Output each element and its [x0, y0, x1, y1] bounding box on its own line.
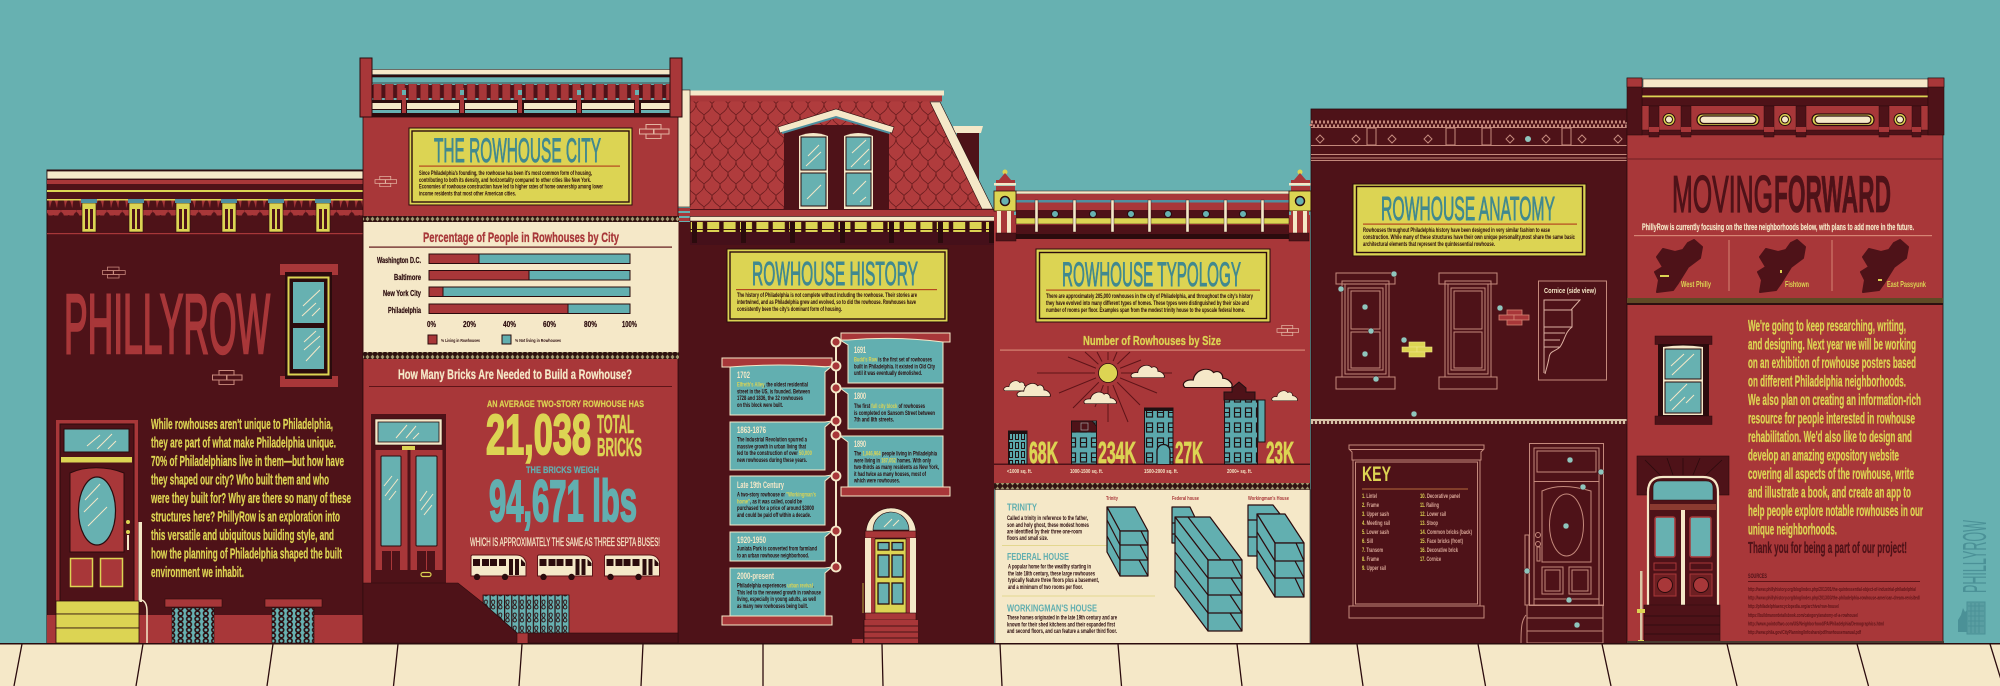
- eaves: [690, 210, 998, 245]
- bricks stats: BRICKS: [597, 432, 642, 462]
- size chart: houses and values: <1000 sq. ft.: [1007, 469, 1032, 475]
- panel 1691: [840, 338, 943, 383]
- building body: [690, 209, 994, 644]
- plate text: The history of Philadelphia is not complete without including the rowhouse. Their stories are: [737, 292, 917, 299]
- diagram: federal house: Federal house: [1172, 496, 1199, 502]
- icon: bus: [538, 555, 592, 580]
- basement window grate: [165, 599, 222, 643]
- map: west philly: [1655, 240, 1711, 292]
- trinity text: TRINITY: [1007, 502, 1037, 514]
- bar labels: Baltimore: [394, 273, 421, 282]
- panel late 19th century: purchased for a price of around $3000: [737, 505, 814, 512]
- panel 2000-present: as many new rowhouses being built.: [737, 603, 808, 610]
- timeline nodes: [832, 338, 840, 572]
- panel 1920-1950: Juniata Park is converted from farmland: [737, 546, 817, 552]
- panel 1800: [840, 388, 943, 429]
- panel 2000-present: living, especially in young adults, as well: [737, 596, 816, 603]
- panel 1863-1876: [730, 421, 832, 470]
- key: 2. Frame: [1362, 502, 1379, 509]
- window diagram 1: [1336, 273, 1395, 389]
- cornice: [360, 58, 682, 117]
- map: east passyunk: East Passyunk: [1887, 279, 1926, 289]
- bar labels: 60%: [543, 320, 556, 329]
- bar labels: Washington D.C.: [377, 256, 421, 265]
- panel 1890: were living in 187,052 homes. With only: [853, 458, 931, 464]
- title plate: ROWHOUSE ANATOMY: [1381, 191, 1555, 228]
- federal house text: FEDERAL HOUSE: [1007, 551, 1069, 563]
- title plate: [1353, 184, 1586, 256]
- title plate: [409, 128, 632, 205]
- diagram: federal house: [1172, 496, 1242, 631]
- panel 1800: The first full city block of rowhouses: [854, 403, 925, 410]
- diagram: trinity: [1106, 496, 1148, 576]
- workingman's house text: WORKINGMAN'S HOUSE: [1007, 602, 1097, 614]
- panel 1691: 1691: [854, 345, 866, 355]
- icon: bricks: [1277, 325, 1299, 336]
- title: MOVING: [1672, 166, 1773, 224]
- panel 2000-present: [730, 567, 832, 616]
- panel late 19th century: [730, 475, 832, 525]
- bar labels: 0%: [427, 320, 436, 329]
- panel 1920-1950: to an urban rowhouse neighborhood.: [737, 552, 809, 560]
- panel 1702: Elfreth's Alley, the oldest residential: [737, 382, 808, 388]
- trinity text: floors and small size.: [1007, 535, 1048, 542]
- cornice: [994, 170, 1311, 241]
- window: [280, 264, 338, 387]
- size chart: houses and values: 2000+ sq. ft.: [1227, 469, 1252, 475]
- legend: % Not living in Rowhouses: [515, 338, 561, 344]
- sources: https://buildmanordetailsbook.com/category/anatomy-of-a-rowhouse/: [1748, 613, 1858, 619]
- workingman's house text: These homes originated in the late 19th century and are: [1007, 614, 1117, 622]
- panel 1800: 7th and 8th streets.: [854, 416, 894, 424]
- panel 1702: street in the US, is founded. Between: [737, 388, 810, 396]
- bricks stats: AN AVERAGE TWO-STORY ROWHOUSE HAS: [487, 399, 644, 410]
- text: PHILLYROW: [1956, 520, 1993, 593]
- bar labels: [377, 256, 637, 329]
- right post: [1289, 170, 1311, 241]
- sidewalk: [0, 643, 2000, 686]
- stoop: [363, 583, 517, 643]
- panel 1691: Budd's Row is the first set of rowhouses: [854, 356, 932, 364]
- panel 1890: 1890: [854, 439, 866, 449]
- key: 6. Sill: [1362, 538, 1373, 545]
- panel 1890: it had twice as many houses, most of: [854, 471, 927, 478]
- heading: bricks: How Many Bricks Are Needed to Build a Rowhouse?: [398, 367, 632, 382]
- panel 1863-1876: 1863-1876: [737, 425, 766, 435]
- federal house text: [1007, 551, 1099, 591]
- title plate: THE ROWHOUSE CITY: [434, 132, 601, 170]
- icon: bus: [604, 555, 660, 580]
- key: [1349, 445, 1484, 618]
- basement grate: [483, 595, 569, 633]
- size chart: houses and values: 27K: [1175, 435, 1203, 470]
- door diagram: [1521, 444, 1604, 643]
- panel late 19th century: home", as it was called, could be: [737, 498, 802, 506]
- diagram: workingman's house: [1248, 496, 1304, 597]
- key: 14. Common bricks (back): [1420, 529, 1472, 536]
- sources: [1748, 574, 1920, 636]
- panel: house types: [995, 490, 1310, 644]
- cornice side view box: Cornice (side view): [1544, 286, 1596, 295]
- icon: bricks: [212, 370, 242, 385]
- bricks stats: [470, 399, 660, 549]
- stoop: [56, 601, 139, 643]
- building 6: moving forward: [1627, 78, 1944, 644]
- dormer: [778, 109, 894, 210]
- chart heading: Percentage of People in Rowhouses by City: [423, 229, 619, 245]
- trinity text: Called a trinity in reference to the father,: [1007, 515, 1088, 522]
- panel 1890: which were rowhouses.: [853, 478, 900, 484]
- plate text: consistently been the city's dominant form of housing.: [737, 306, 842, 313]
- federal house text: typically feature three floors plus a basement,: [1008, 577, 1099, 584]
- door with arch: [852, 508, 918, 644]
- plate text: [419, 170, 603, 198]
- icon: bricks: [102, 267, 125, 278]
- legend: % Living in Rowhouses: [441, 338, 480, 344]
- diagram: workingman's house: Workingman's House: [1248, 496, 1289, 502]
- key: 11. Railing: [1420, 502, 1439, 509]
- intro text: this versatile and ubiquitous building style, and: [151, 528, 334, 544]
- key: 5. Lower sash: [1362, 529, 1389, 536]
- key: 8. Frame: [1362, 556, 1379, 563]
- chart heading: Number of Rowhouses by Size: [1083, 333, 1221, 348]
- workingman's house text: known for their shed kitchens and their expanded first: [1007, 622, 1116, 628]
- clouds: [1004, 365, 1298, 404]
- size chart: houses and values: 234K: [1098, 435, 1136, 470]
- trinity text: are identified by their three one-room: [1007, 528, 1082, 536]
- map: fishtown: Fishtown: [1785, 279, 1809, 289]
- key: 9. Upper rail: [1362, 565, 1386, 572]
- bricks stats: TOTAL: [597, 409, 634, 439]
- size chart: houses and values: 1500-2000 sq. ft.: [1144, 469, 1178, 475]
- pattern band: [1311, 419, 1627, 424]
- plate text: [1363, 227, 1575, 248]
- bricks stats: 21,038: [486, 403, 591, 467]
- intro text: environment we inhabit.: [151, 565, 244, 581]
- size chart: houses and values: 68K: [1029, 435, 1058, 470]
- icon: bricks: [640, 124, 669, 139]
- chimney: [953, 126, 983, 190]
- key: 1. Lintel: [1362, 493, 1377, 500]
- cornice: [1627, 78, 1944, 137]
- panel 1691: until it was eventually demolished.: [854, 370, 922, 377]
- key: KEY: [1362, 463, 1391, 486]
- house small: [1008, 431, 1027, 464]
- panel 1920-1950: [730, 531, 832, 561]
- house medium: [1072, 421, 1096, 464]
- sun: [1037, 352, 1172, 422]
- numbered markers: [1338, 271, 1604, 628]
- bar labels: 80%: [584, 320, 597, 329]
- building 4: rowhouse typology: [994, 170, 1311, 644]
- key: 7. Transom: [1362, 547, 1383, 554]
- map: east passyunk: [1861, 240, 1926, 292]
- base red band: [47, 615, 363, 643]
- key: 4. Meeting rail: [1362, 520, 1390, 527]
- diagram: trinity: Trinity: [1106, 496, 1119, 502]
- mansard roof: [690, 90, 993, 209]
- panel 1702: 1702: [737, 370, 750, 380]
- building 1: PhillyRow intro: PHILLYROW: [64, 277, 270, 371]
- bars: [429, 254, 630, 314]
- intro text: were they built for? Why are there so many of these: [150, 491, 351, 507]
- text: plans: unique neighborhoods.: [1748, 522, 1837, 538]
- sources: http://www.phillyhistory.org/blog/index.php/2013/01/the-quintessential-object-of-industrial-philadelphia/: [1748, 587, 1916, 593]
- pattern band: [994, 483, 1310, 490]
- top left banner: [722, 358, 832, 367]
- bottom right banner: [841, 487, 950, 496]
- intro text: [150, 417, 351, 581]
- size chart: houses and values: 23K: [1266, 435, 1294, 470]
- intro text: they are part of what make Philadelphia unique.: [151, 436, 336, 452]
- workingman's house text: and second floors, and can feature a smaller third floor.: [1007, 628, 1117, 635]
- cornice side view box: [1538, 281, 1606, 380]
- brick: face: [1402, 342, 1432, 357]
- sources: SOURCES: [1748, 574, 1767, 580]
- panel 1800: is completed on Sansom Street between: [854, 410, 935, 417]
- panel 1890: The 1,046,964 people living in Philadelphia: [854, 450, 937, 458]
- bar labels: 100%: [622, 320, 637, 329]
- bricks stats: THE BRICKS WEIGH: [526, 465, 599, 475]
- intro text: 70% of Philadelphians live in them—but how have: [151, 454, 344, 470]
- panel 1890: two-thirds as many residents as New York,: [854, 464, 939, 471]
- plate text: [737, 292, 917, 313]
- plate text: Rowhouses throughout Philadelphia history have been designed in very similar fashion to ease: [1363, 227, 1550, 234]
- panel 1800: 1800: [854, 391, 866, 401]
- size chart: houses and values: [994, 382, 1310, 475]
- sources: http://www.phillyhistory.org/blog/index.php/2013/03/the-philadelphia-rowhouse-american-dream-revisited/: [1748, 596, 1920, 602]
- plate text: construction. While many of these structures have their own unique personality,most share the same basic: [1363, 234, 1575, 241]
- intro text: While rowhouses aren't unique to Philadelphia,: [151, 417, 333, 433]
- panel 1920-1950: 1920-1950: [737, 535, 766, 545]
- panel 2000-present: Philadelphia experiences urban revival.: [737, 582, 814, 590]
- pattern band: [1627, 298, 1943, 305]
- top right banner: [841, 333, 950, 342]
- panel late 19th century: A two-story rowhouse or "Workingman's: [737, 492, 816, 498]
- bar labels: 20%: [463, 320, 476, 329]
- intro text: structures here? PhillyRow is an exploration into: [151, 510, 340, 526]
- federal house text: the late 18th century, these large rowhouses: [1008, 570, 1095, 578]
- legend: [428, 335, 561, 344]
- text: plans: [1748, 318, 1923, 557]
- left post: [994, 170, 1016, 241]
- plate text: There are approximately 205,000 rowhouses in the city of Philadelphia, and throughout the city's history: [1046, 293, 1253, 300]
- panel 2000-present: This led to the renewed growth in rowhouse: [737, 590, 821, 596]
- window: [1655, 336, 1712, 424]
- panel 1890: [840, 436, 943, 487]
- key: 3. Upper sash: [1362, 511, 1389, 518]
- key: 13. Stoop: [1420, 520, 1438, 527]
- plate text: Since Philadelphia's founding, the rowhouse has been it's most common form of housing,: [419, 170, 592, 177]
- brick: common: [1499, 310, 1529, 325]
- bar labels: 40%: [503, 320, 516, 329]
- sources: http://www.phila.gov/CityPlanning/Infoshare/pdf/rowhousemanual.pdf: [1748, 630, 1861, 636]
- title plate: ROWHOUSE TYPOLOGY: [1062, 256, 1241, 294]
- trinity text: son and holy ghost, these modest homes: [1007, 522, 1089, 529]
- door: [1637, 456, 1729, 643]
- door: [56, 420, 147, 643]
- intro text: how the planning of Philadelphia shaped the built: [151, 546, 342, 562]
- panel late 19th century: Late 19th Century: [737, 480, 784, 490]
- federal house text: A popular home for the wealthy starting in: [1008, 564, 1091, 570]
- key: 10. Decorative panel: [1420, 493, 1460, 500]
- title plate: [1036, 249, 1270, 322]
- sources: http://www.pointoftwo.com/US/Neighborhood/PA/Philadelphia/Demographics.html: [1748, 622, 1884, 628]
- basement window grate: [265, 599, 322, 643]
- map: fishtown: [1758, 240, 1809, 292]
- cornice: [47, 171, 363, 234]
- plate text: income residents that most other American cities.: [419, 190, 516, 198]
- key: 16. Decorative brick: [1420, 547, 1458, 554]
- plate text: number of rooms per floor. Examples span from the modest trinity house to the upscale federal home.: [1046, 307, 1245, 314]
- title plate: [727, 249, 948, 322]
- intro text: they shaped our city? Who built them and who: [151, 472, 329, 488]
- building 3: rowhouse history: [678, 90, 998, 644]
- bar labels: Philadelphia: [388, 306, 421, 315]
- plate text: contributing to both its density, and horizontality compared to other cities like New York.: [419, 177, 591, 184]
- trinity text: [1007, 502, 1089, 542]
- plate text: intertwined, and as Philadelphia grew and evolved, so to did the rowhouse. Rowhouses have: [737, 299, 916, 306]
- watermark logo: [1956, 520, 1993, 634]
- panel 1702: on this block were built.: [737, 402, 783, 409]
- panel: bar chart: [363, 216, 679, 359]
- panel late 19th century: and could be paid off within a decade.: [737, 512, 811, 519]
- key: 17. Cornice: [1420, 556, 1441, 563]
- plate text: they have evolved into many different types of homes. These types were distinguished by their size and: [1046, 300, 1249, 307]
- map: west philly: West Philly: [1681, 279, 1711, 289]
- cornice outlines: [1311, 122, 1627, 160]
- building 1: PhillyRow intro: [47, 170, 363, 644]
- bricks stats: WHICH IS APPROXIMATELY THE SAME AS THREE SEPTA BUSES!: [470, 535, 660, 549]
- sources: http://philadelphiaencyclopedia.org/archive/row-house/: [1748, 604, 1839, 610]
- icon: bricks: [375, 176, 397, 187]
- title plate: ROWHOUSE HISTORY: [752, 256, 918, 293]
- key: 15. Face bricks (front): [1420, 538, 1463, 545]
- panel 2000-present: 2000-present: [737, 571, 774, 581]
- panel 1863-1876: massive growth in urban living that: [737, 444, 807, 450]
- building 2: the rowhouse city: [360, 58, 682, 644]
- plate text: Economies of rowhouse construction have led to higher rates of home ownership among lower: [419, 184, 603, 190]
- panel 1863-1876: new rowhouses during these years.: [737, 457, 807, 464]
- panel 1863-1876: led to the construction of over 50,000: [737, 450, 812, 457]
- building 5: rowhouse anatomy: [1311, 109, 1627, 644]
- plate text: architectural elements that represent the quintessential rowhouse.: [1363, 241, 1495, 248]
- bottom left banner: [722, 616, 832, 625]
- base strip: [528, 633, 678, 643]
- house large: [1144, 408, 1173, 464]
- federal house text: and a minimum of two rooms per floor.: [1008, 584, 1083, 591]
- icon: bus: [471, 555, 526, 580]
- window diagram 2: [1439, 273, 1497, 389]
- workingman's house text: [1007, 602, 1117, 635]
- neighborhoods: maps: [1655, 240, 1926, 292]
- bricks stats: 94,671 lbs: [489, 469, 637, 534]
- panel 1863-1876: The Industrial Revolution spurred a: [737, 436, 807, 444]
- key: 12. Lower rail: [1420, 511, 1446, 518]
- plate text: [1046, 293, 1253, 314]
- house largest: [1224, 382, 1265, 464]
- panel 1702: [730, 365, 832, 415]
- timeline: [722, 333, 950, 625]
- panel 1691: built in Philadelphia. It existed in Old City: [854, 364, 935, 370]
- size chart: houses and values: 1000-1500 sq. ft.: [1070, 469, 1103, 475]
- bar labels: New York City: [383, 289, 421, 298]
- door with stoop: [363, 414, 517, 643]
- panel 1702: 1728 and 1836, the 32 rowhouses: [737, 395, 803, 402]
